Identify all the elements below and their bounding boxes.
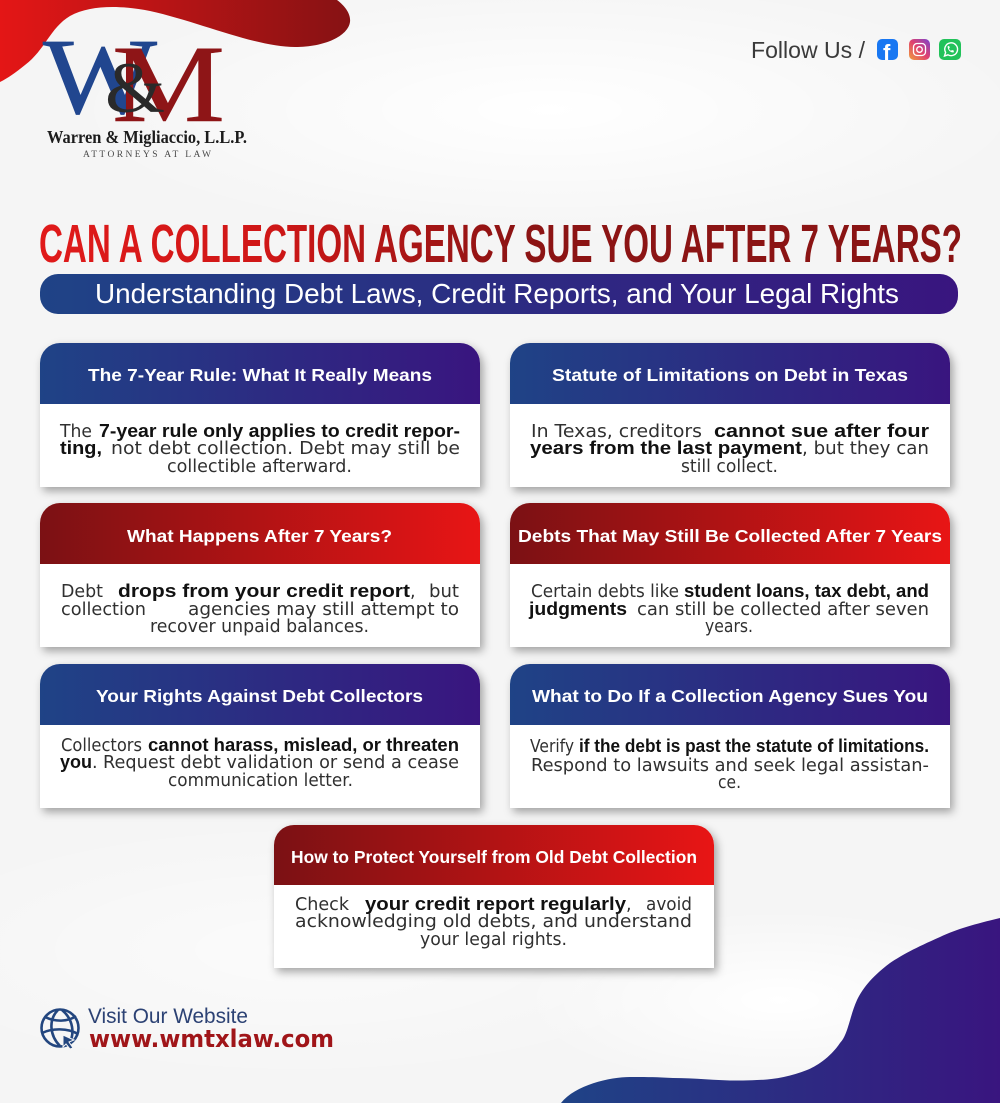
logo: Warren & Migliaccio: Warren & Migliaccio, L.L.P. bbox=[47, 127, 247, 147]
body text: protect yourself: avoid bbox=[646, 895, 692, 915]
body text: protect yourself: Check bbox=[295, 895, 350, 915]
heading: protect yourself: How to Protect Yourself from Old Debt Collection bbox=[291, 847, 697, 867]
body text: the 7-year rule bbox=[59, 420, 460, 477]
body text: debts still collectible: student loans, tax debt, and bbox=[684, 580, 929, 601]
visit our website label: Visit Our Website bbox=[88, 1005, 248, 1028]
body text: statute of limitations bbox=[530, 420, 929, 477]
panel: if an agency sues you bbox=[510, 664, 950, 808]
body text: protect yourself: , bbox=[626, 895, 632, 915]
body text: if an agency sues you: Verify bbox=[530, 737, 574, 757]
body text: your rights: . bbox=[92, 753, 98, 773]
heading: your rights: Your Rights Against Debt Collectors bbox=[96, 686, 423, 706]
body text: what happens after 7 years: , bbox=[410, 582, 416, 602]
body text: debts still collectible: years. bbox=[705, 617, 753, 637]
body text: the 7-year rule: The bbox=[59, 422, 92, 442]
logo: Warren & Migliaccio: W bbox=[43, 18, 157, 137]
icon: whatsapp bbox=[939, 39, 961, 60]
body text: debts still collectible bbox=[528, 580, 929, 637]
heading: if an agency sues you: What to Do If a Collection Agency Sues You bbox=[532, 686, 928, 706]
logo: Warren & Migliaccio: & bbox=[105, 48, 165, 128]
body text: debts still collectible: judgments bbox=[528, 598, 627, 619]
icon: instagram bbox=[909, 39, 930, 60]
body text: if an agency sues you: Respond to lawsuits and seek legal assistan- bbox=[531, 756, 929, 776]
body text: the 7-year rule: collectible afterward. bbox=[167, 457, 352, 477]
body text: if an agency sues you: if the debt is past the statute of limitations. bbox=[579, 735, 929, 756]
body text: if an agency sues you: ce. bbox=[718, 773, 741, 793]
panel: statute of limitations bbox=[510, 343, 950, 487]
body text: your rights: Collectors bbox=[61, 736, 142, 756]
body text: debts still collectible: can still be collected after seven bbox=[637, 600, 929, 620]
body text: the 7-year rule: not debt collection. Debt may still be bbox=[111, 439, 460, 459]
subtitle pill: Understanding Debt Laws, Credit Reports, and Your Legal Rights bbox=[95, 278, 899, 309]
panel: protect yourself bbox=[274, 825, 714, 968]
body text: statute of limitations: cannot sue after four bbox=[714, 420, 929, 441]
body text: what happens after 7 years: Debt bbox=[61, 582, 103, 602]
logo: Warren & Migliaccio: M bbox=[112, 23, 225, 145]
subtitle pill bbox=[40, 274, 958, 314]
body text: what happens after 7 years: drops from your credit report bbox=[118, 580, 410, 601]
logo: Warren & Migliaccio: ATTORNEYS AT LAW bbox=[83, 150, 211, 160]
body text: what happens after 7 years: collection bbox=[61, 600, 146, 620]
website url: www.wmtxlaw.com bbox=[89, 1025, 334, 1053]
body text: statute of limitations: still collect. bbox=[681, 457, 778, 477]
body text: what happens after 7 years: recover unpaid balances. bbox=[150, 617, 369, 637]
body text: your rights: communication letter. bbox=[168, 771, 353, 791]
panel: the 7-year rule bbox=[40, 343, 480, 487]
body text: your rights: cannot harass, mislead, or threaten bbox=[148, 734, 459, 755]
panel: your rights bbox=[40, 664, 480, 808]
body text: what happens after 7 years: but bbox=[429, 582, 459, 602]
follow us label: Follow Us / bbox=[751, 37, 866, 63]
icon: facebook: f bbox=[883, 40, 891, 65]
icon: facebook bbox=[877, 39, 898, 65]
panel: debts still collectible bbox=[510, 503, 950, 647]
heading: what happens after 7 years: What Happens After 7 Years? bbox=[127, 526, 392, 546]
body text: your rights: you bbox=[60, 751, 92, 772]
body text: protect yourself bbox=[295, 893, 692, 950]
logo: Warren & Migliaccio bbox=[43, 18, 247, 160]
body text: statute of limitations: years from the last payment bbox=[530, 437, 802, 458]
heading: debts still collectible: Debts That May Still Be Collected After 7 Years bbox=[518, 526, 942, 546]
blue wave bottom right bbox=[561, 918, 1000, 1103]
red wave top left bbox=[0, 0, 350, 82]
icon: globe with cursor bbox=[42, 1010, 78, 1049]
body text: if an agency sues you bbox=[530, 735, 929, 793]
heading: statute of limitations: Statute of Limitations on Debt in Texas bbox=[552, 365, 908, 385]
body text: protect yourself: your credit report regularly bbox=[365, 893, 627, 914]
heading: the 7-year rule: The 7-Year Rule: What It Really Means bbox=[88, 365, 432, 385]
body text: your rights: Request debt validation or send a cease bbox=[103, 753, 459, 773]
body text: the 7-year rule: ting, bbox=[60, 437, 102, 458]
body text: your rights bbox=[60, 734, 459, 791]
body text: debts still collectible: Certain debts like bbox=[531, 582, 679, 602]
body text: what happens after 7 years: agencies may still attempt to bbox=[188, 600, 459, 620]
body text: the 7-year rule: 7-year rule only applies to credit repor- bbox=[99, 420, 460, 441]
body text: protect yourself: your legal rights. bbox=[420, 930, 567, 950]
body text: statute of limitations: In Texas, creditors bbox=[531, 422, 702, 442]
panel: what happens after 7 years bbox=[40, 503, 480, 647]
body text: protect yourself: acknowledging old debts, and understand bbox=[295, 912, 692, 932]
body text: statute of limitations: , but they can bbox=[802, 439, 929, 459]
body text: what happens after 7 years bbox=[61, 580, 459, 637]
